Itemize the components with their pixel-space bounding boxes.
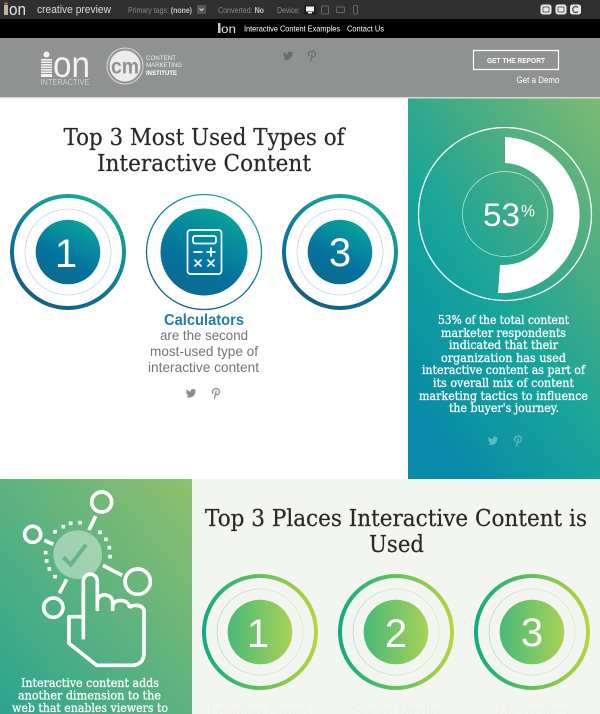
content marketing institute logo: CONTENT — [146, 55, 176, 62]
badge: place 3 — [476, 576, 588, 688]
panel text — [12, 676, 168, 714]
icon: calculator — [188, 230, 222, 274]
badge: place 2: 2 — [385, 612, 407, 656]
description text: the buyer's journey. — [449, 401, 559, 415]
heading: most used types — [64, 125, 346, 177]
content marketing institute logo — [107, 48, 182, 84]
get the report button: GET THE REPORT — [487, 56, 545, 65]
calculators caption: most-used type of — [150, 343, 258, 359]
toolbar title: creative preview — [37, 4, 111, 16]
badge: number 1: 1 — [55, 232, 77, 276]
heading: most used types: Interactive Content — [97, 151, 312, 177]
action buttons — [540, 4, 581, 14]
badge: place 1 — [204, 576, 316, 688]
description text — [419, 313, 588, 415]
panel: top places — [192, 479, 600, 714]
donut chart: % — [521, 202, 535, 220]
toolbar device: Device: — [277, 6, 300, 15]
panel text: another dimension to the — [18, 688, 161, 702]
calculators caption: are the second — [160, 327, 248, 343]
description text: organization has used — [441, 351, 566, 365]
heading: top places: Used — [369, 532, 424, 558]
badge: calculator — [146, 194, 262, 310]
badge: place 3: 3 — [521, 611, 543, 655]
badge: number 3: 3 — [329, 231, 351, 275]
header share icons — [283, 51, 315, 61]
heading: top places — [205, 506, 587, 558]
badge: number 3 — [284, 196, 396, 308]
description text: marketing tactics to influence — [419, 389, 588, 403]
badge: place 2 — [340, 576, 452, 688]
content marketing institute logo: cm — [111, 56, 139, 78]
nav links: Interactive Content Examples — [244, 24, 340, 34]
description text: 53% of the total content — [438, 313, 569, 327]
share icons — [186, 389, 219, 398]
faint captions — [209, 703, 569, 714]
donut chart: 53 — [483, 197, 520, 233]
calculators caption: interactive content — [148, 359, 259, 375]
ion interactive logo: INTERACTIVE — [40, 78, 90, 87]
nav link contact: Contact Us — [347, 24, 384, 34]
icon: pointing hand — [25, 492, 150, 665]
toolbar ion logo: on — [9, 0, 26, 19]
description text: marketer respondents — [441, 326, 566, 340]
ion interactive logo: on — [53, 44, 90, 85]
get the report button — [474, 50, 558, 70]
description text: its overall mix of content — [433, 376, 574, 390]
heading: most used types: Top 3 Most Used Types of — [64, 125, 346, 151]
ion interactive logo — [40, 44, 90, 87]
grey header — [0, 38, 600, 98]
nav ion logo: on — [221, 22, 236, 36]
content marketing institute logo: MARKETING — [146, 62, 182, 69]
badge: number 1 — [12, 196, 124, 308]
tags dropdown — [197, 5, 206, 14]
description text: interactive content as part of — [422, 363, 586, 377]
device icons — [304, 5, 358, 15]
calculators caption — [148, 312, 259, 375]
content marketing institute logo: INSTITUTE — [146, 70, 177, 77]
black navigation bar — [0, 19, 600, 38]
share icons — [488, 436, 521, 446]
donut chart — [418, 128, 592, 300]
preview toolbar — [0, 0, 600, 19]
panel: most used types — [0, 98, 408, 480]
panel: 53 percent — [408, 98, 600, 480]
toolbar converted: Converted: No — [218, 6, 264, 15]
badge: place 1: 1 — [247, 612, 269, 656]
calculators caption: Calculators — [164, 312, 244, 329]
get a demo link: Get a Demo — [516, 75, 560, 86]
toolbar tags: Primary tags: (none) — [128, 6, 192, 15]
description text: indicated that their — [449, 338, 558, 352]
panel: interactive dimension — [0, 479, 192, 714]
panel text: Interactive content adds — [21, 676, 159, 690]
